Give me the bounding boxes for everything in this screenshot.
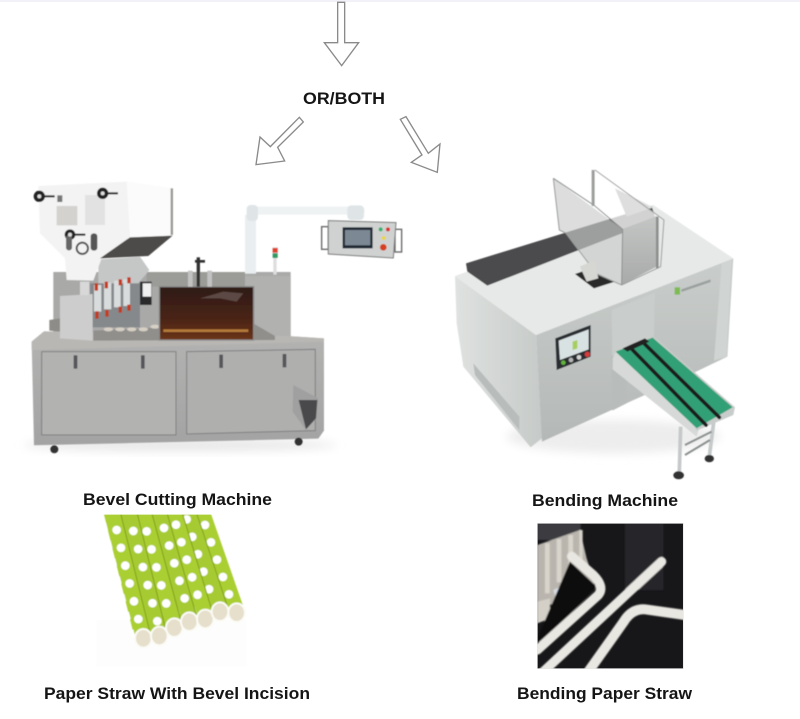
amber cover bbox=[159, 287, 254, 340]
arrow: down-right arrow bbox=[400, 117, 440, 172]
base cabinet bbox=[32, 331, 324, 445]
label: Paper Straw With Bevel Incision: Paper Straw With Bevel Incision bbox=[44, 684, 310, 703]
signal light bbox=[273, 247, 278, 257]
reels bbox=[34, 188, 118, 251]
conveyor frame bbox=[613, 352, 699, 437]
straw 7 bbox=[197, 500, 237, 613]
slot bbox=[575, 269, 615, 288]
label: Bevel Cutting Machine: Bevel Cutting Machine bbox=[83, 490, 272, 509]
straw 4 bbox=[152, 514, 197, 618]
mechanism bbox=[580, 260, 598, 282]
straw 5 bbox=[167, 514, 212, 616]
illustration: bending machine bbox=[455, 170, 735, 479]
adjuster bbox=[188, 271, 193, 287]
arrow: top down arrow bbox=[324, 2, 359, 66]
front face bbox=[536, 258, 733, 442]
photo: white bent paper straws bbox=[537, 523, 685, 672]
feed columns bbox=[98, 257, 149, 285]
conveyor legs bbox=[679, 420, 714, 472]
straw 3 bbox=[137, 514, 181, 626]
white hopper bbox=[38, 182, 173, 281]
straw 6 bbox=[182, 514, 228, 608]
dark strip bbox=[466, 206, 656, 286]
articulated arm bbox=[245, 215, 256, 274]
left face bbox=[455, 276, 542, 447]
touch screen bbox=[555, 325, 591, 370]
label: Bending Paper Straw: Bending Paper Straw bbox=[517, 684, 693, 703]
arrow: down-left arrow bbox=[256, 117, 303, 165]
top face bbox=[455, 205, 733, 335]
work table bbox=[93, 323, 275, 341]
straw openings bbox=[135, 602, 245, 648]
straw 2 bbox=[120, 514, 166, 632]
label: Bending Machine: Bending Machine bbox=[532, 491, 678, 510]
side cover bbox=[60, 294, 93, 341]
heading: OR/BOTH: OR/BOTH bbox=[303, 89, 385, 108]
green belt bbox=[616, 338, 733, 428]
illustration: bevel cutting machine bbox=[23, 182, 402, 453]
straw 1 bbox=[103, 514, 150, 634]
photo: green polka dot straws bbox=[103, 514, 245, 648]
control panel bbox=[322, 227, 328, 249]
black belts bbox=[633, 344, 719, 425]
acrylic guard bbox=[595, 170, 664, 229]
vent bbox=[473, 363, 519, 430]
back housing bbox=[53, 272, 291, 338]
logo bbox=[675, 287, 680, 295]
